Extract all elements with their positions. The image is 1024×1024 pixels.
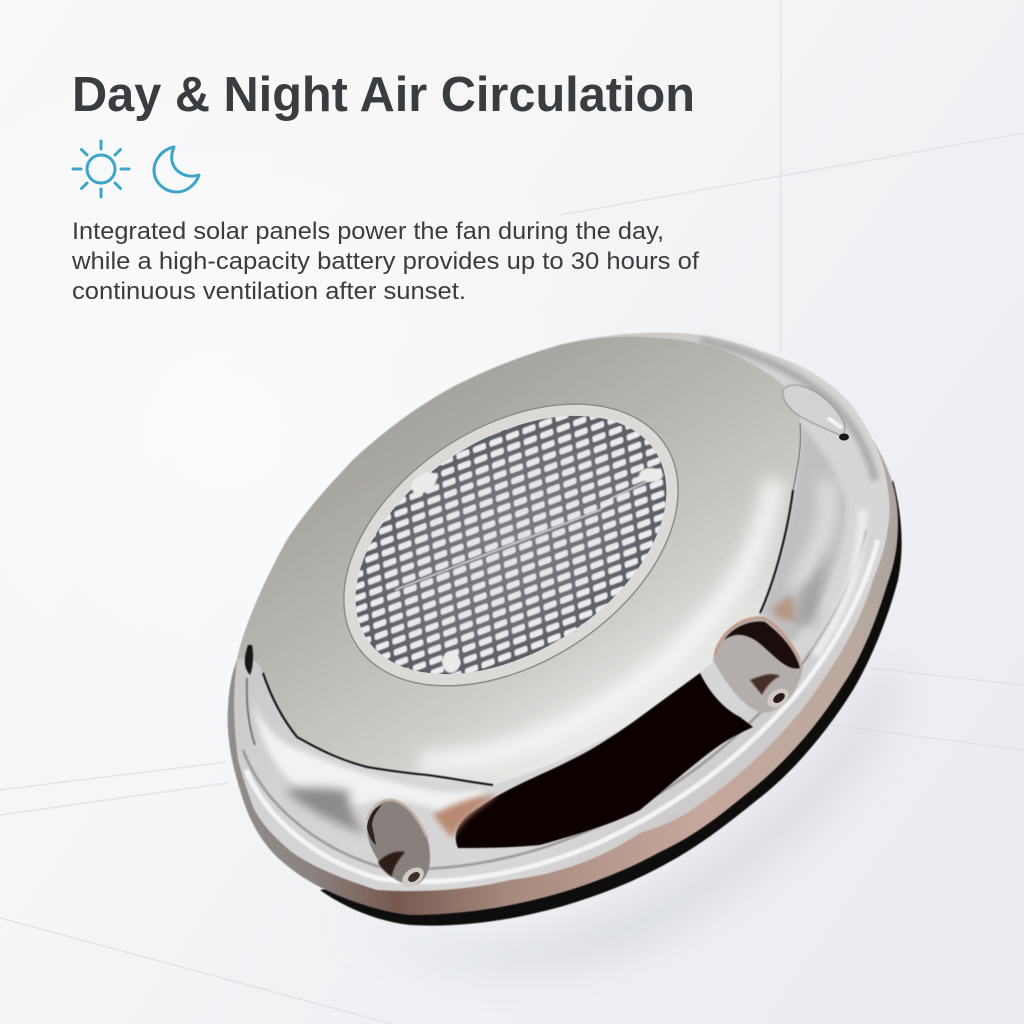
dome lower bright sheen: [420, 480, 775, 762]
description text: [71, 218, 699, 305]
solar cells grid: [356, 416, 666, 674]
dome edge crease lines: [263, 490, 793, 785]
mounting ear lower right: [713, 618, 803, 713]
trim ring: [228, 440, 898, 915]
copper reflection: [433, 795, 497, 838]
rim reflection right: [760, 423, 845, 642]
chrome rim: [234, 332, 890, 891]
rim reflection lower left bright: [253, 700, 490, 815]
rim top right dark sheen: [700, 340, 875, 480]
panel bus bars: [395, 480, 650, 590]
solar panel: [343, 403, 679, 687]
rim reflection lower left grey: [285, 788, 368, 835]
dome surface: [237, 337, 801, 785]
left dark reflection: [245, 645, 253, 675]
rim reflection grey above ear: [795, 545, 830, 625]
product: solar vent: [227, 332, 902, 926]
description text: Integrated solar panels power the fan during the day,: [72, 218, 664, 245]
icon: moon: [154, 147, 199, 192]
panel clips: [407, 468, 663, 673]
description text: while a high-capacity battery provides up to 30 hours of: [71, 248, 699, 275]
rim reflection copper tint: [772, 596, 796, 622]
rim grey groove: [243, 530, 866, 869]
description text: continuous ventilation after sunset.: [72, 278, 466, 305]
icon: sun: [73, 141, 129, 197]
mounting ear lower left: [367, 800, 430, 890]
heading: Day & Night Air Circulation: [72, 68, 695, 122]
mounting ear top right: [783, 385, 849, 440]
rim outer white band: [246, 540, 878, 882]
floor shadow: [340, 660, 900, 968]
rubber gasket: [320, 480, 902, 926]
panel clear ring: [292, 346, 730, 744]
black reflection: [456, 673, 753, 848]
